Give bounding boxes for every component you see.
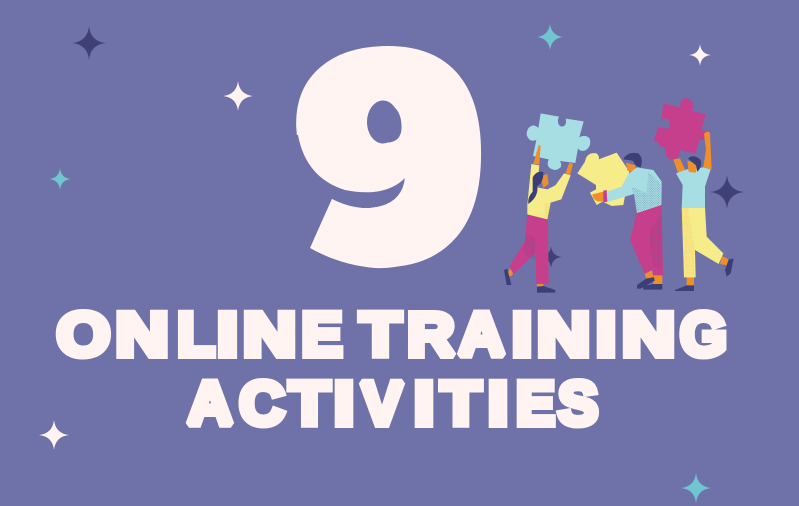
title: online training: N xyxy=(243,301,296,369)
title: activities xyxy=(188,369,598,438)
title: activities: C xyxy=(240,370,284,438)
title: online training: N xyxy=(622,301,675,369)
title: online training: A xyxy=(459,302,504,369)
title: activities: A xyxy=(188,370,232,438)
puzzle piece: blue xyxy=(527,113,590,170)
title: online training: I xyxy=(217,301,238,369)
title: online training: O xyxy=(57,300,110,369)
title: online training: I xyxy=(596,302,616,369)
title: activities: I xyxy=(334,371,354,438)
title: activities: I xyxy=(488,371,508,438)
puzzle piece: yellow xyxy=(577,153,629,206)
big number 9: 9 xyxy=(303,5,475,307)
illustration: team assembling puzzle xyxy=(504,98,734,293)
title: online training: L xyxy=(177,300,215,368)
title: online training xyxy=(57,300,727,369)
title: online training: R xyxy=(407,301,455,369)
title: online training: I xyxy=(512,302,532,369)
title: activities: S xyxy=(558,369,598,438)
person: woman in magenta trousers xyxy=(504,145,573,293)
title: online training: N xyxy=(537,301,590,369)
title: activities: T xyxy=(289,371,330,438)
title: activities: I xyxy=(414,371,434,438)
person: man with raised puzzle piece xyxy=(673,132,734,291)
title: online training: N xyxy=(116,301,168,369)
title: activities: T xyxy=(441,370,481,438)
title: online training: T xyxy=(360,300,401,369)
person: man in blue shirt xyxy=(592,153,663,290)
title: activities: V xyxy=(362,370,403,438)
title: online training: E xyxy=(302,300,342,368)
title: activities: E xyxy=(516,369,555,438)
puzzle piece: magenta xyxy=(654,98,710,160)
title: online training: G xyxy=(680,300,727,369)
